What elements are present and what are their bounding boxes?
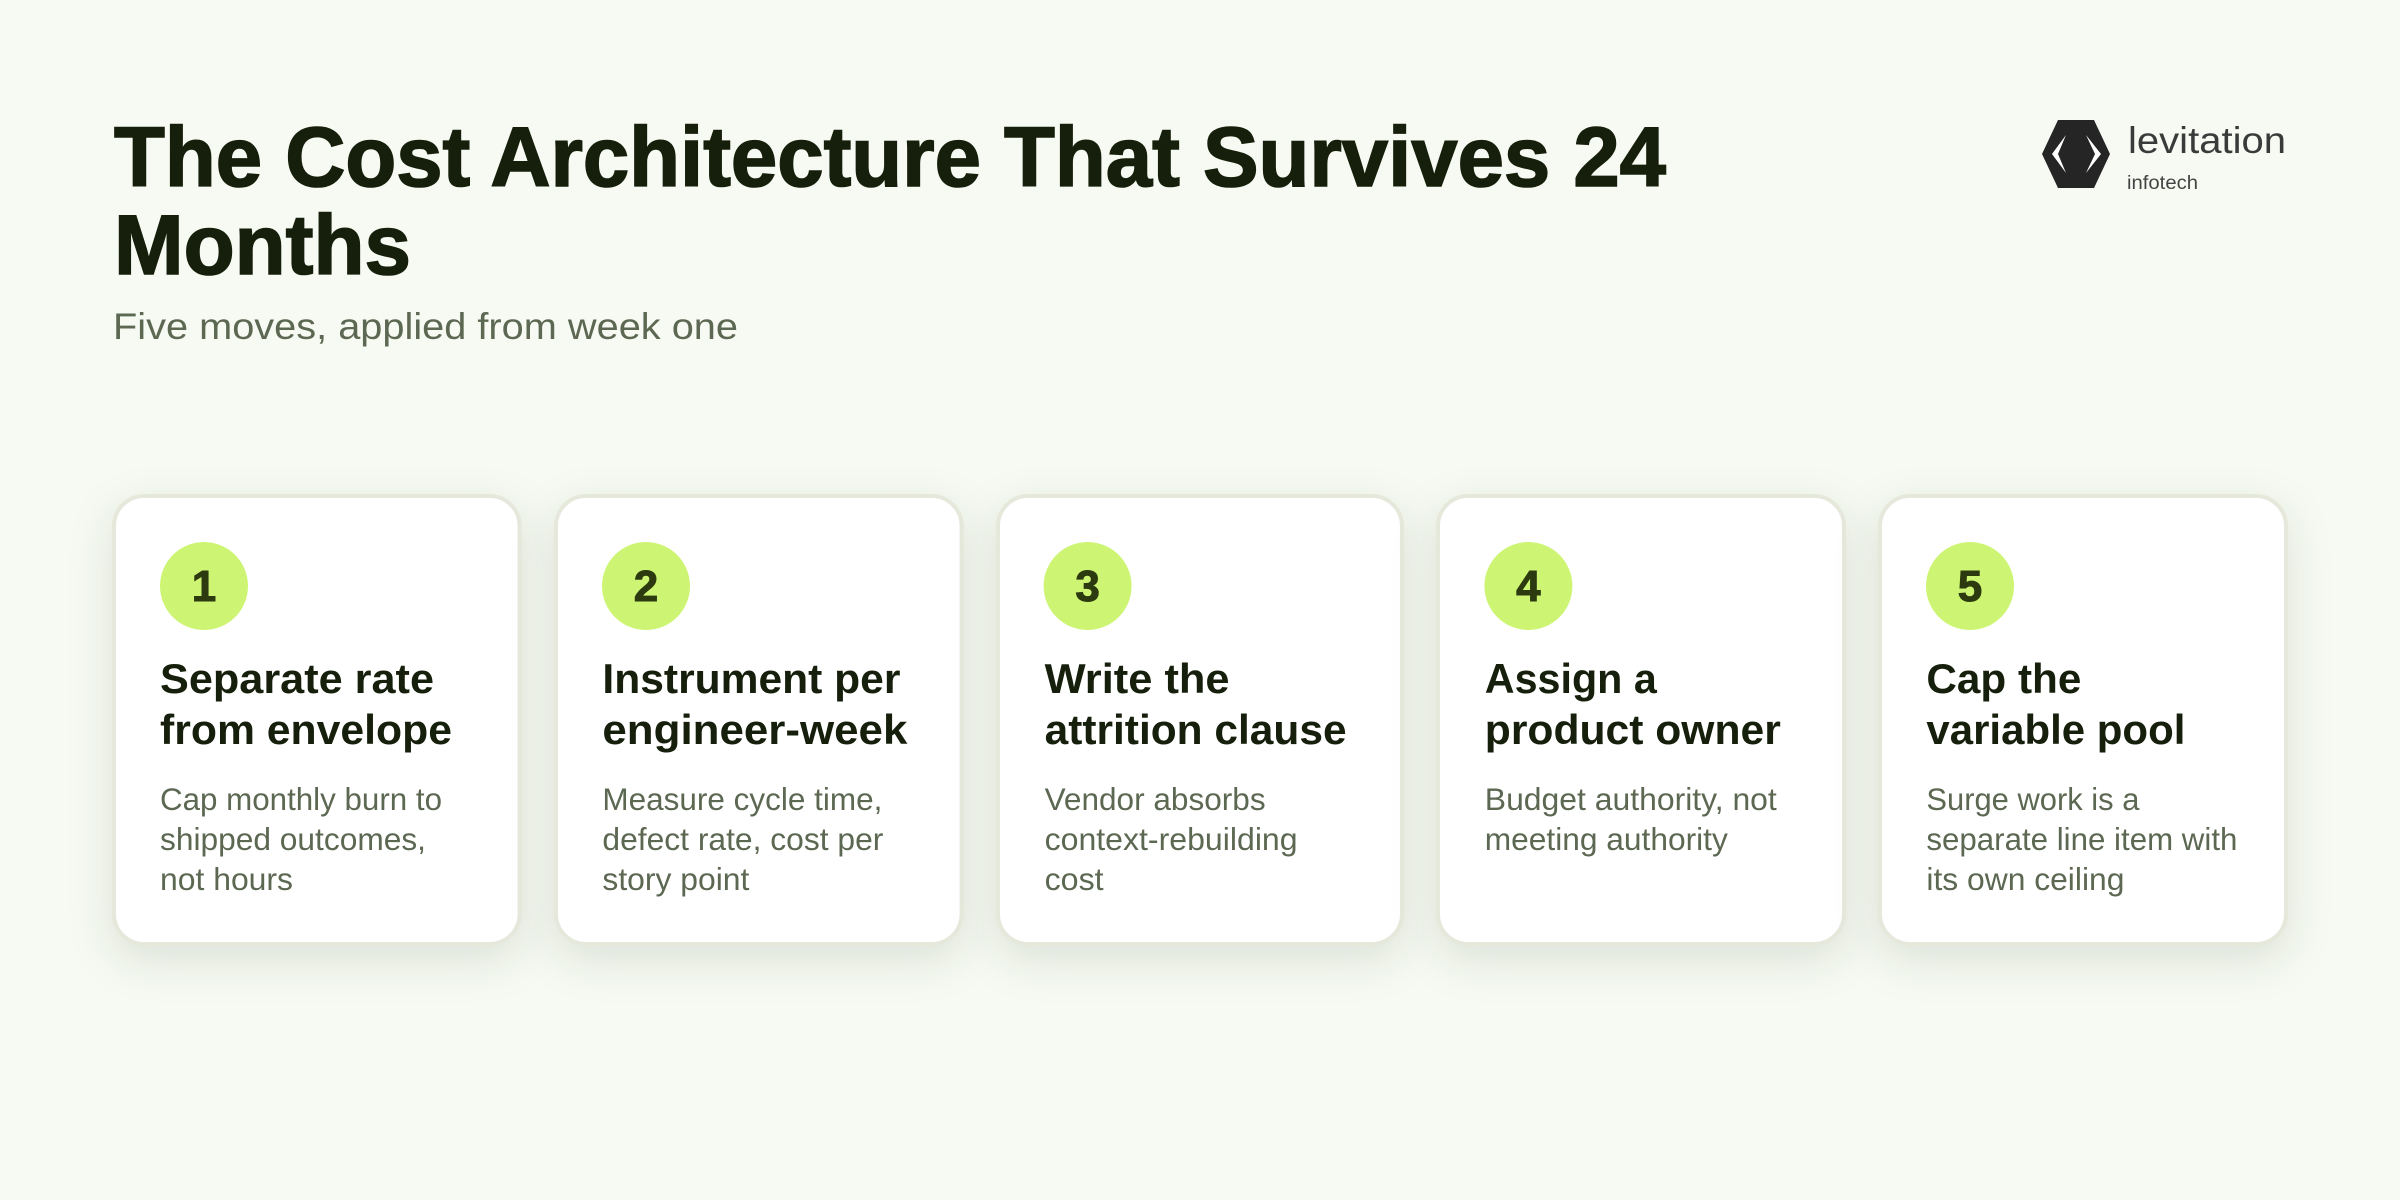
number badge 4: 4 bbox=[1516, 562, 1541, 611]
number badge 1: 1 bbox=[192, 562, 216, 611]
title bbox=[114, 110, 1666, 292]
card 4 heading: product owner bbox=[1485, 706, 1781, 753]
number badge 3: 3 bbox=[1075, 562, 1100, 611]
card 1 heading: Separate rate bbox=[160, 655, 434, 702]
panel: card 1 bbox=[114, 496, 520, 944]
title: The Cost Architecture That Survives 24 bbox=[114, 110, 1666, 204]
card 5 text: its own ceiling bbox=[1926, 861, 2124, 897]
card 3 text: Vendor absorbs bbox=[1045, 781, 1266, 817]
card 3 heading: attrition clause bbox=[1045, 706, 1347, 753]
card 3 text bbox=[1045, 781, 1298, 897]
card 1 text: Cap monthly burn to bbox=[160, 781, 442, 817]
number badge 2: 2 bbox=[634, 562, 658, 611]
panel: card 4 bbox=[1438, 496, 1844, 944]
card 2 heading: engineer-week bbox=[602, 706, 908, 753]
card 3 heading: Write the bbox=[1045, 655, 1230, 702]
card 2 text: story point bbox=[602, 861, 750, 897]
icon: hexagon with chevrons bbox=[2042, 120, 2110, 188]
card 4 text bbox=[1485, 781, 1777, 857]
subtitle: Five moves, applied from week one bbox=[113, 306, 738, 347]
number badge 2 bbox=[602, 542, 690, 630]
card 4 text: meeting authority bbox=[1485, 821, 1728, 857]
card 2 text: defect rate, cost per bbox=[602, 821, 883, 857]
card 2 text bbox=[602, 781, 883, 897]
card 4 heading bbox=[1485, 655, 1781, 753]
panel: card 5 bbox=[1880, 496, 2286, 944]
title: Months bbox=[114, 198, 411, 292]
card 2 text: Measure cycle time, bbox=[602, 781, 882, 817]
number badge 1 bbox=[160, 542, 248, 630]
card 5 heading: Cap the bbox=[1926, 655, 2081, 702]
number badge 5 bbox=[1926, 542, 2014, 630]
card 5 text bbox=[1926, 781, 2237, 897]
card 5 text: separate line item with bbox=[1926, 821, 2237, 857]
card 4 heading: Assign a bbox=[1485, 655, 1657, 702]
card 1 heading: from envelope bbox=[160, 706, 452, 753]
card 2 heading: Instrument per bbox=[602, 655, 900, 702]
number badge 3 bbox=[1044, 542, 1132, 630]
card 4 text: Budget authority, not bbox=[1485, 781, 1777, 817]
card 5 text: Surge work is a bbox=[1926, 781, 2140, 817]
card 2 heading bbox=[602, 655, 908, 753]
card 3 text: cost bbox=[1045, 861, 1104, 897]
logo: levitation infotech bbox=[2042, 120, 2286, 194]
number badge 4 bbox=[1484, 542, 1572, 630]
card 1 text: shipped outcomes, bbox=[160, 821, 426, 857]
card 5 heading bbox=[1926, 655, 2185, 753]
card 1 heading bbox=[160, 655, 452, 753]
logo wordmark: levitation bbox=[2128, 120, 2286, 161]
logo tagline: infotech bbox=[2127, 173, 2198, 194]
card 3 heading bbox=[1045, 655, 1347, 753]
number badge 5: 5 bbox=[1958, 562, 1982, 611]
panel: card 3 bbox=[998, 496, 1402, 944]
card 1 text bbox=[160, 781, 442, 897]
card 5 heading: variable pool bbox=[1926, 706, 2185, 753]
card 1 text: not hours bbox=[160, 861, 293, 897]
card 3 text: context-rebuilding bbox=[1045, 821, 1298, 857]
panel: card 2 bbox=[556, 496, 962, 944]
